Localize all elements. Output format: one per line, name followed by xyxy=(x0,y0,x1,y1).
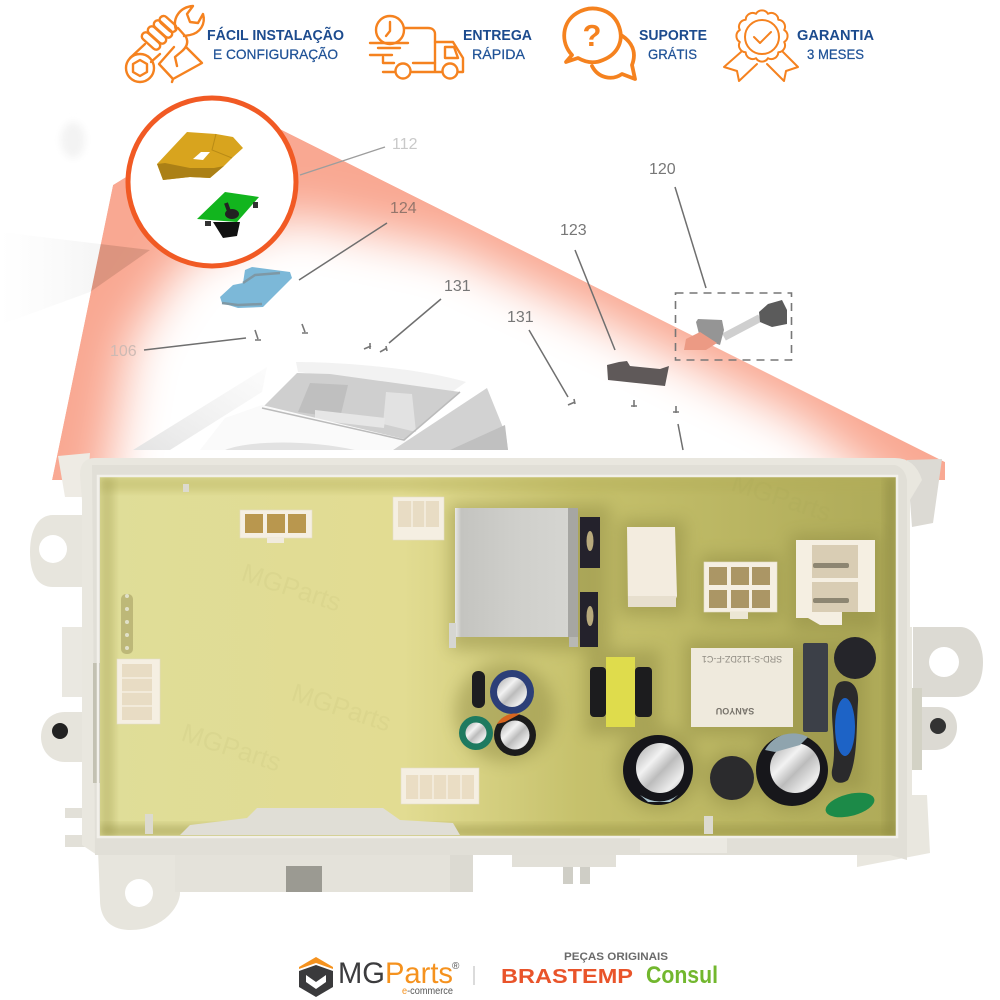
circuit board assembly xyxy=(30,453,983,930)
heading: fácil instalação: FÁCIL INSTALAÇÃO xyxy=(207,26,344,44)
label: 123: 123 xyxy=(560,222,587,239)
footer: brand names: PEÇAS ORIGINAIS xyxy=(564,951,668,963)
yellow transformer xyxy=(590,657,652,727)
callout circle xyxy=(128,98,296,266)
inner bottom ledge xyxy=(180,808,460,835)
heading: entrega: ENTREGA xyxy=(463,28,533,44)
connector: 6-pin xyxy=(704,562,777,619)
connector: left 4-pin xyxy=(117,659,160,724)
label: 120 xyxy=(649,161,706,288)
footer: brand names xyxy=(501,951,718,989)
label: 124: 124 xyxy=(390,200,417,217)
metal shield xyxy=(449,508,578,648)
electrolytic capacitor large right xyxy=(756,733,828,806)
watermark: MGParts xyxy=(178,717,285,777)
watermark: MGParts xyxy=(288,677,395,737)
part: harness 120 with dashed box xyxy=(676,293,792,360)
icon: wrench and hand xyxy=(126,6,204,82)
label: 131 left: 131 xyxy=(444,278,471,295)
mounting holes xyxy=(39,535,959,907)
heading: entrega: RÁPIDA xyxy=(472,46,526,62)
part: green board xyxy=(197,192,259,238)
logo mark xyxy=(299,957,333,997)
label: 124 xyxy=(299,200,417,280)
X capacitor xyxy=(803,643,828,732)
label: 131 right: 131 xyxy=(507,309,534,326)
label: 112 xyxy=(300,136,418,175)
capacitor blue xyxy=(490,670,534,714)
black power parts xyxy=(580,517,600,647)
heading: suporte: GRÁTIS xyxy=(648,46,697,62)
stem line xyxy=(678,424,683,450)
watermark: MGParts xyxy=(238,557,345,617)
label: 131 right xyxy=(507,309,568,397)
connector: top 3-pin xyxy=(240,510,312,543)
footer: brand names: BRASTEMP xyxy=(501,966,633,988)
icon: delivery truck xyxy=(370,16,463,78)
heading: fácil instalação: E CONFIGURAÇÃO xyxy=(213,46,338,62)
heading: suporte xyxy=(639,28,707,62)
connector: large 2-pin xyxy=(796,540,875,625)
round fuse xyxy=(834,637,876,679)
housing: outer shell xyxy=(30,453,983,930)
label: 106: 106 xyxy=(110,343,137,360)
zoom cone highlight xyxy=(52,130,945,480)
small posts xyxy=(145,484,713,834)
pcb xyxy=(100,467,897,837)
footer: brand names: Consul xyxy=(646,962,718,989)
icon: warranty seal xyxy=(724,10,798,81)
label: 131 left xyxy=(389,278,471,343)
part: yellow door lock xyxy=(157,132,243,180)
ghost washer shape, left xyxy=(0,122,150,325)
watermark xyxy=(178,467,835,777)
label: 123 xyxy=(560,222,615,350)
part: blue cover xyxy=(220,267,292,308)
blue safety capacitor xyxy=(832,681,858,783)
part: black clip 123 xyxy=(607,361,669,386)
icon: support bubbles xyxy=(564,9,635,79)
relay: SRD-S-112DZ-F-C1 xyxy=(702,654,782,664)
label: 120: 120 xyxy=(649,161,676,178)
header pins xyxy=(121,594,133,654)
heading: entrega xyxy=(463,28,533,62)
black coil xyxy=(710,756,754,800)
white block xyxy=(627,527,677,607)
exploded view: washer panel xyxy=(133,362,508,450)
green capacitor xyxy=(823,788,877,822)
connector: top small xyxy=(393,497,444,540)
footer divider xyxy=(473,966,475,985)
relay xyxy=(691,648,793,727)
screws xyxy=(255,324,679,413)
heading: suporte: SUPORTE xyxy=(639,28,707,44)
heading: garantia: GARANTIA xyxy=(797,28,875,44)
label: 112: 112 xyxy=(392,136,418,153)
diode xyxy=(472,671,485,708)
frame inner edge xyxy=(98,476,897,837)
logo wordmark: ® xyxy=(452,961,460,972)
logo wordmark: MGParts xyxy=(338,957,453,990)
relay: SANYOU xyxy=(716,706,754,716)
heading: fácil instalação xyxy=(207,26,344,62)
capacitor orange xyxy=(494,713,536,756)
watermark: MGParts xyxy=(728,467,835,527)
capacitor green small xyxy=(459,716,493,750)
connector: bottom 5-pin xyxy=(401,768,479,804)
logo wordmark: e-commerce xyxy=(402,986,453,997)
electrolytic capacitor large left xyxy=(623,735,693,805)
heading: garantia xyxy=(797,28,875,62)
icon: support bubbles: ? xyxy=(583,18,601,53)
heading: garantia: 3 MESES xyxy=(807,46,864,62)
footer: MGParts logo xyxy=(299,957,460,997)
label: 106 xyxy=(110,338,246,360)
